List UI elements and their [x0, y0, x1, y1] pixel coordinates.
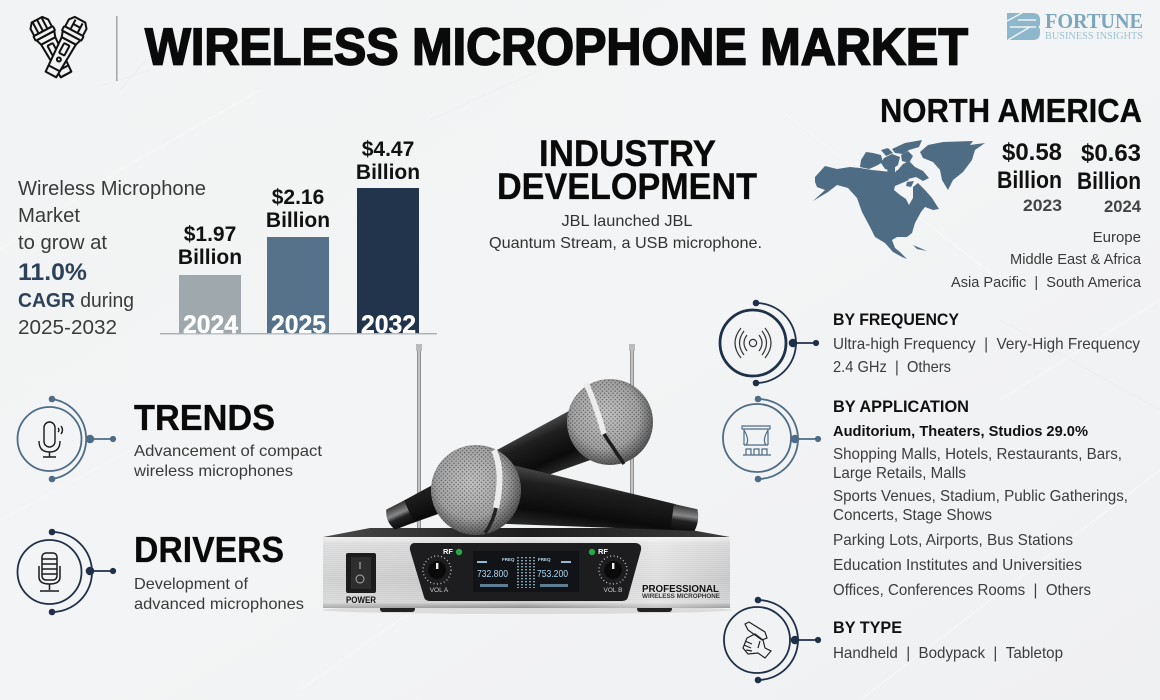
text block: CAGR summary: to grow at [18, 232, 107, 254]
model text: PROFESSIONAL [642, 583, 720, 595]
panel: North America values: $0.63 [1081, 140, 1141, 167]
text block: other regions: Middle East & Africa [1010, 251, 1142, 268]
control panel: 753.200 [537, 569, 568, 580]
image: front microphone [431, 445, 702, 550]
panel: by frequency [720, 300, 1140, 386]
panel: trends: Advancement of compact [134, 443, 323, 460]
text block: CAGR summary: Wireless Microphone [18, 178, 206, 200]
logo: Fortune Business Insights: FORTUNE [1045, 9, 1143, 33]
panel: North America values: 2024 [1104, 198, 1142, 216]
logo: Fortune Business Insights: BUSINESS INSIGHTS [1045, 31, 1143, 42]
bar 2032: $4.47 [362, 138, 414, 161]
bar 2032: Billion [356, 161, 420, 184]
panel: North America values [997, 139, 1142, 216]
panel: by frequency: BY FREQUENCY [833, 310, 960, 329]
model text: WIRELESS MICROPHONE [642, 594, 720, 600]
icon: hand holding microphone [724, 597, 821, 683]
control panel: FREQ [538, 557, 551, 562]
text block: CAGR summary [18, 178, 206, 339]
panel: by frequency: Ultra-high Frequency | Very-High Frequency [833, 336, 1140, 353]
panel: trends [18, 396, 323, 482]
control panel: FREQ [502, 557, 515, 562]
panel: drivers [18, 529, 304, 615]
panel: by type: BY TYPE [833, 618, 902, 637]
panel: industry development: Quantum Stream, a USB microphone. [489, 235, 762, 252]
text block: CAGR summary: Market [18, 205, 80, 227]
bar 2024 [178, 223, 242, 339]
panel: by application: Large Retails, Malls [833, 465, 966, 482]
panel: North America values: Billion [997, 167, 1062, 194]
header divider [116, 16, 118, 81]
text block: other regions: Asia Pacific | South America [951, 274, 1142, 291]
panel: drivers: advanced microphones [134, 596, 304, 613]
bar chart: market size [160, 138, 437, 339]
control panel: RF [598, 547, 608, 556]
icon: theater stage [723, 396, 821, 482]
panel: drivers: Development of [134, 576, 249, 593]
bar 2032 [356, 138, 420, 339]
panel: North America values: Billion [1077, 168, 1141, 195]
text block: CAGR summary: 11.0% [18, 259, 87, 286]
panel: by application: Sports Venues, Stadium, Public Gatherings, [833, 488, 1128, 505]
image: back microphone [377, 379, 653, 546]
panel: trends: TRENDS [134, 397, 275, 438]
panel: by application: Offices, Conferences Rooms | Others [833, 582, 1091, 599]
control panel [410, 543, 641, 601]
panel: by type [724, 597, 1063, 683]
control panel: RF [443, 547, 453, 556]
panel: by frequency: 2.4 GHz | Others [833, 359, 951, 376]
panel: by type: Handheld | Bodypack | Tabletop [833, 645, 1063, 662]
bar 2024: 2024 [183, 311, 238, 339]
panel: industry development: JBL launched JBL [562, 213, 693, 230]
panel: industry development [489, 133, 762, 252]
icon: studio microphone [18, 529, 116, 615]
title: WIRELESS MICROPHONE MARKET [145, 18, 968, 76]
panel: by application [723, 396, 1128, 599]
bar 2025: $2.16 [272, 186, 324, 209]
bar 2025: 2025 [271, 311, 326, 339]
control panel: VOL B [604, 587, 622, 594]
bar 2025 [266, 186, 330, 339]
panel: drivers: DRIVERS [134, 529, 284, 570]
panel: industry development: INDUSTRY [539, 133, 716, 174]
icon: microphone with sound [18, 396, 116, 482]
logo: Fortune Business Insights [1007, 9, 1143, 42]
icon: signal [720, 300, 819, 386]
control panel: 732.800 [477, 569, 508, 580]
panel: North America values: $0.58 [1002, 139, 1062, 166]
panel: by application: Education Institutes and Universities [833, 557, 1082, 574]
bar 2024: Billion [178, 246, 242, 269]
panel: by application: Shopping Malls, Hotels, Restaurants, Bars, [833, 446, 1122, 463]
bar 2024: $1.97 [184, 223, 236, 246]
control panel: VOL A [430, 587, 449, 594]
text block: other regions [951, 229, 1142, 291]
map: North America [813, 140, 985, 259]
bar 2025: Billion [266, 209, 330, 232]
panel: industry development: DEVELOPMENT [497, 166, 757, 207]
text block: CAGR summary: 2025-2032 [18, 317, 117, 339]
image: receiver body [322, 528, 732, 614]
heading: North America: NORTH AMERICA [880, 92, 1142, 129]
panel: by application: Parking Lots, Airports, Bus Stations [833, 532, 1073, 549]
panel: by application: BY APPLICATION [833, 397, 969, 416]
power switch [346, 553, 376, 605]
antennas [416, 344, 635, 530]
model text [642, 583, 720, 600]
bar 2032: 2032 [361, 311, 416, 339]
icon: crossed microphones [27, 15, 90, 80]
text block: other regions: Europe [1093, 229, 1141, 246]
power switch: POWER [346, 595, 376, 605]
text block: CAGR summary: CAGR during [18, 290, 134, 312]
panel: North America values: 2023 [1023, 197, 1062, 215]
panel: by application: Concerts, Stage Shows [833, 507, 992, 524]
panel: trends: wireless microphones [133, 463, 293, 480]
panel: by application: Auditorium, Theaters, Studios 29.0% [833, 423, 1088, 440]
